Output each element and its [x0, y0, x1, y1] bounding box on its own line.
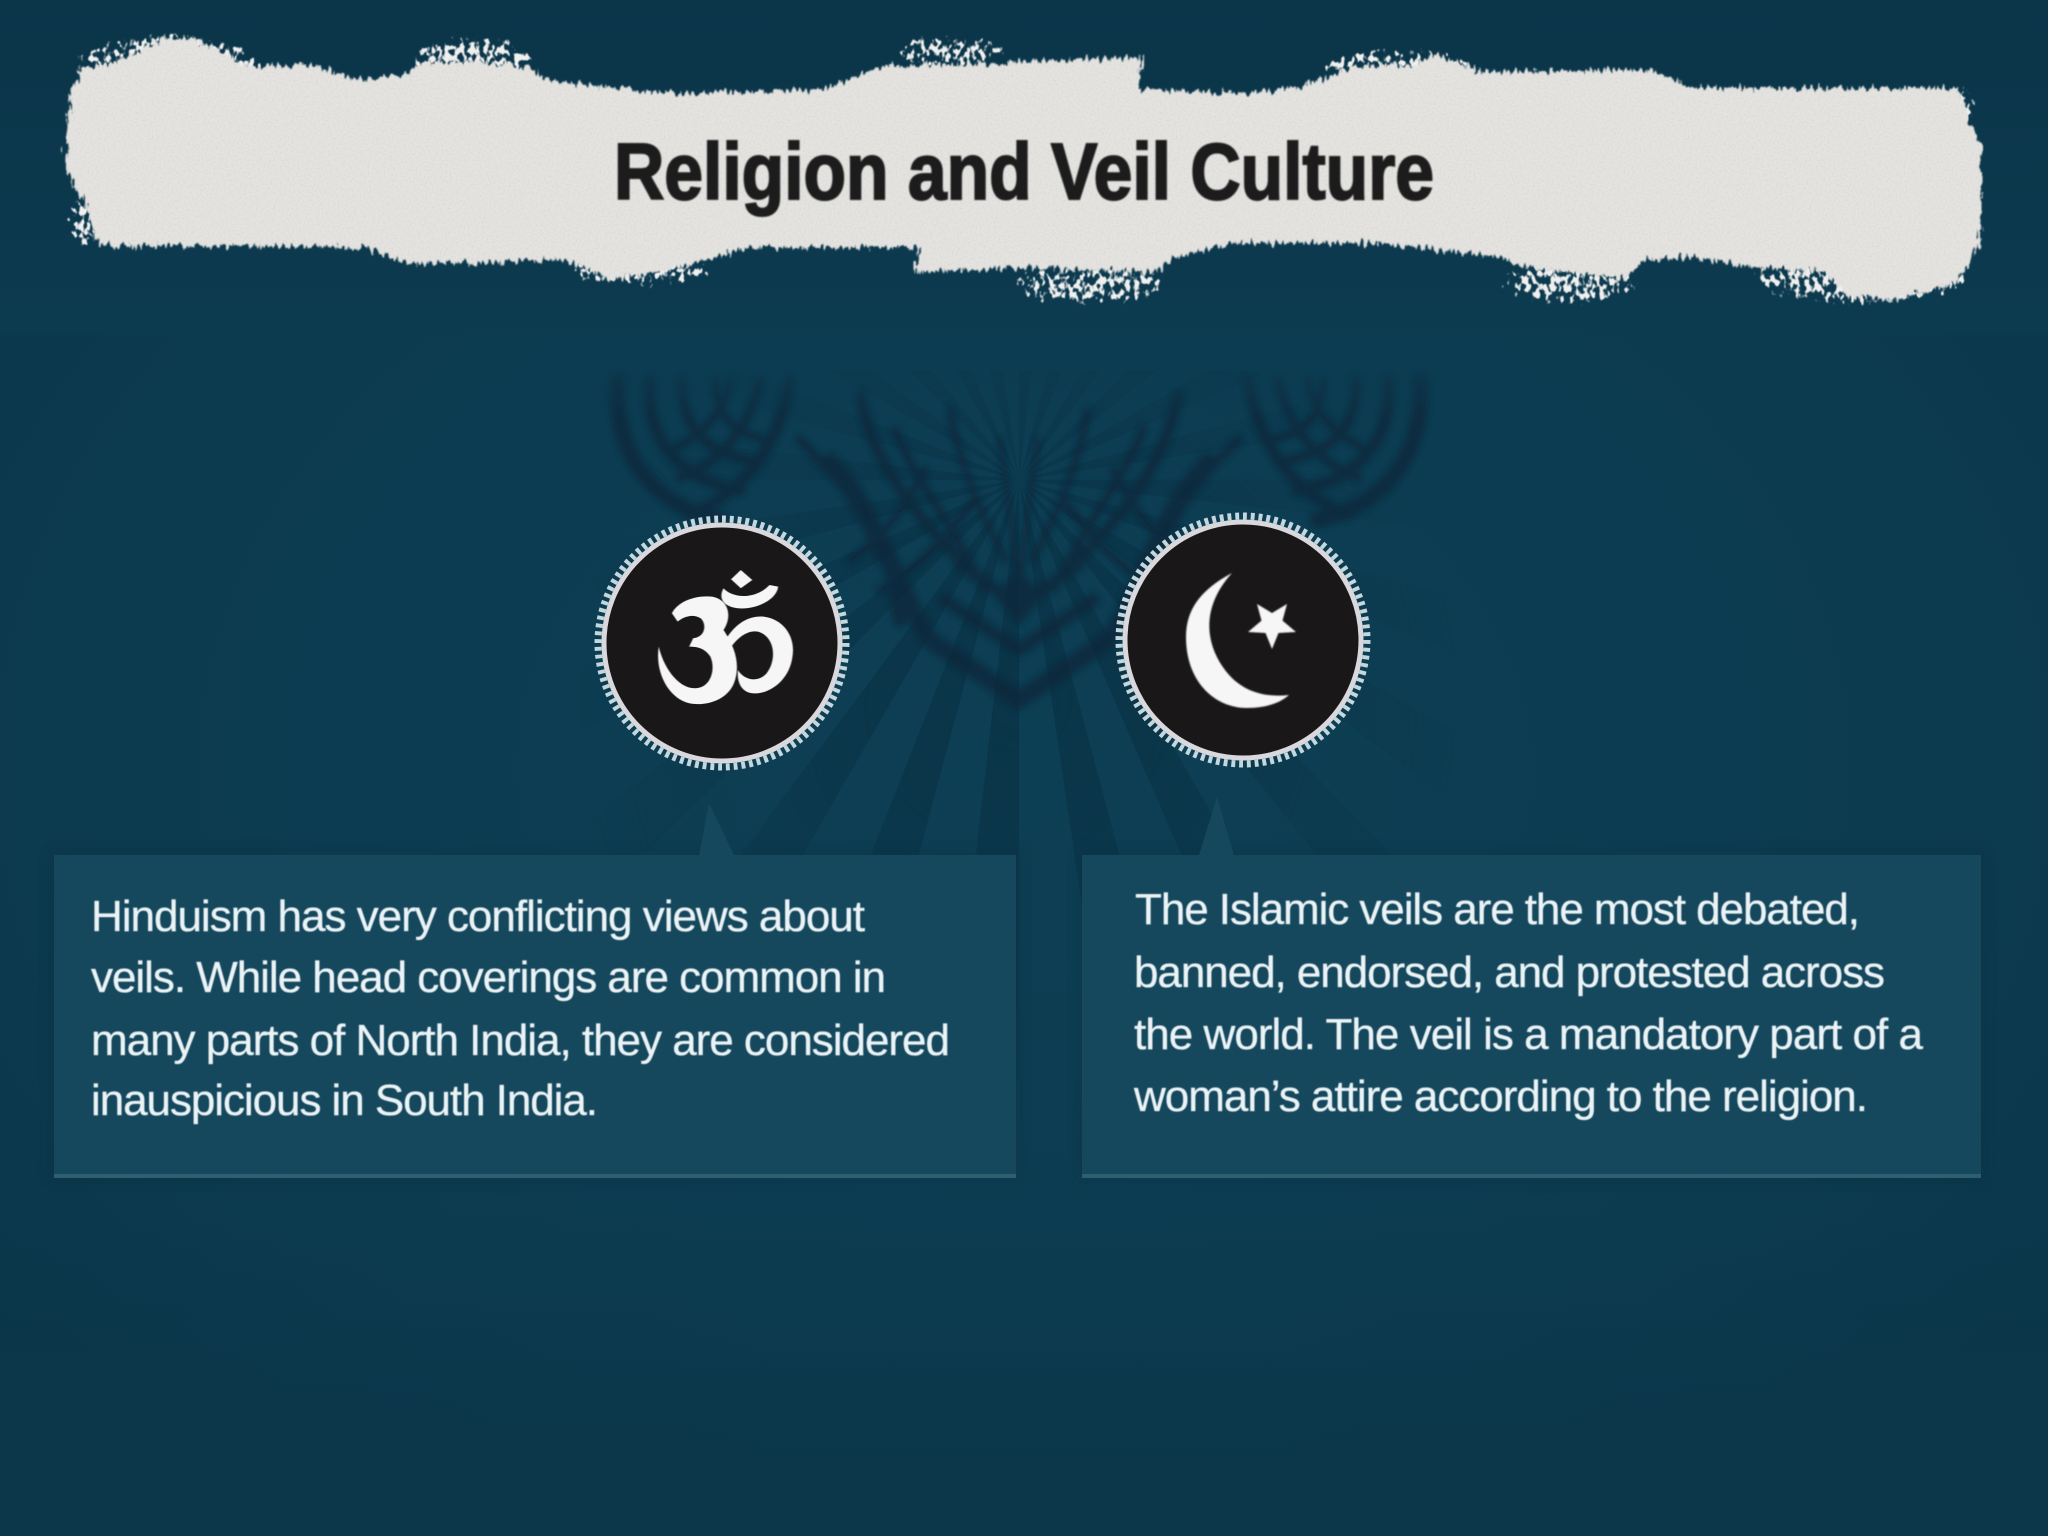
text: Hinduism description: veils. While head coverings are common in	[91, 953, 886, 1002]
icon: Om symbol	[658, 570, 793, 704]
text: Islam description: The Islamic veils are the most debated,	[1135, 885, 1860, 934]
text: Islam description	[1133, 885, 1924, 1121]
panel: Hinduism	[50, 803, 1020, 1181]
panel: Islam	[1078, 797, 1985, 1181]
infographic canvas	[54, 32, 1984, 1178]
text: Hinduism description: many parts of North India, they are considered	[91, 1016, 950, 1065]
title banner: brush stroke	[63, 30, 1982, 309]
medallion: Hinduism Om icon	[598, 519, 846, 767]
text: Hinduism description	[91, 892, 950, 1125]
background ornament: mandala with rays	[610, 378, 1428, 854]
text: Hinduism description: Hinduism has very conflicting views about	[91, 892, 865, 941]
text: Hinduism description: inauspicious in South India.	[91, 1076, 598, 1125]
title: Religion and Veil Culture	[614, 127, 1434, 216]
text: Islam description: woman’s attire according to the religion.	[1133, 1072, 1868, 1121]
icon: star	[1248, 604, 1296, 649]
icon: crescent	[1186, 573, 1289, 708]
text: Islam description: the world. The veil is a mandatory part of a	[1134, 1010, 1924, 1059]
medallion: Islam crescent and star icon	[1119, 516, 1367, 764]
text: Islam description: banned, endorsed, and protested across	[1134, 948, 1885, 997]
